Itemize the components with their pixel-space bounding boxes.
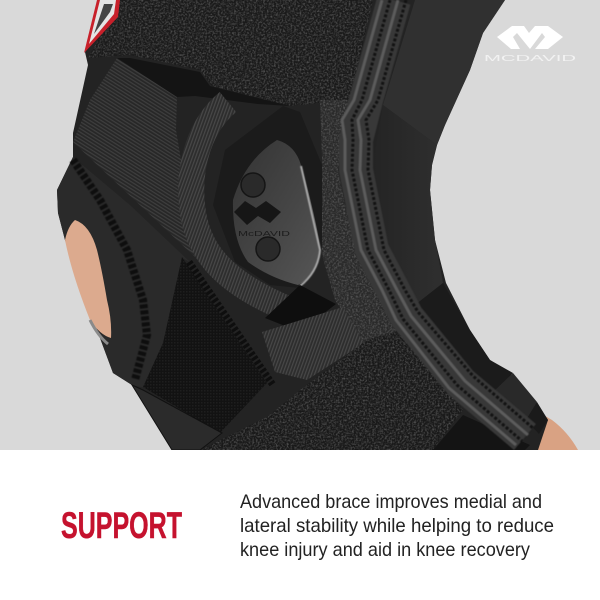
skin: lower leg	[530, 410, 578, 450]
mesh side panel	[320, 100, 405, 345]
lower black woven panel	[143, 257, 267, 433]
body text: knee injury and aid in knee recovery	[240, 539, 530, 561]
bottom hem	[132, 385, 222, 450]
body text: lateral stability while helping to reduce	[240, 515, 554, 537]
red and white badge	[84, 0, 120, 53]
hinge logo mark	[234, 201, 290, 238]
black triangle under hinge	[265, 285, 336, 332]
neoprene knee pad	[57, 157, 190, 388]
body text: Advanced brace improves medial and	[240, 491, 542, 513]
hinge dark frame and elastic	[191, 102, 290, 310]
skin: kneecap opening	[65, 220, 111, 338]
body text	[240, 491, 554, 561]
woven strap tab	[262, 307, 364, 380]
heading: support: SUPPORT	[61, 505, 182, 546]
photo: knee brace	[57, 0, 578, 450]
lower velcro strap	[200, 330, 463, 450]
right sleeve upper panel	[383, 0, 505, 145]
stitched seam on knee pad	[73, 160, 147, 380]
upper velcro strap	[88, 0, 373, 106]
hinge plate	[233, 140, 320, 285]
perforated mesh at bottom	[433, 415, 530, 450]
logo mark	[497, 26, 563, 49]
stitched vertical bands	[342, 0, 534, 445]
right sleeve ankle panel	[492, 373, 537, 420]
right sleeve middle panel	[372, 105, 443, 305]
hinge rivets	[241, 173, 280, 261]
logo wordmark: MCDAVID	[484, 53, 576, 63]
right sleeve cuff	[526, 402, 548, 434]
brace silhouette	[57, 0, 548, 450]
kneecap silver rim	[90, 320, 108, 344]
hinge logo mark: McDAVID	[238, 231, 290, 238]
black seam between panels	[189, 262, 273, 385]
ribbed elastic strap	[73, 58, 195, 257]
hinge frame	[213, 106, 322, 288]
dark band under velcro	[117, 58, 290, 106]
photo background	[0, 0, 600, 450]
white caption band	[0, 450, 600, 600]
hinge plate silver outline	[300, 166, 320, 286]
right sleeve lower panel	[415, 283, 513, 393]
McDavid logo	[484, 26, 576, 63]
